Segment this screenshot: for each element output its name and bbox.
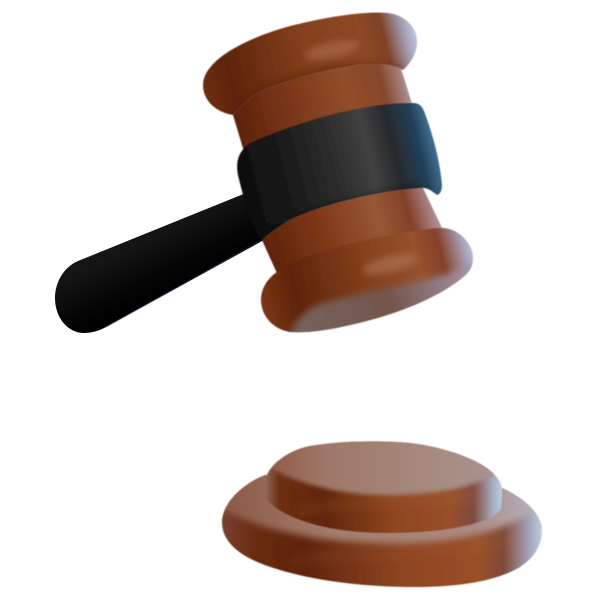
lower disc [221,474,542,588]
upper disc [266,440,502,534]
illustration: gavel and sound block [55,12,542,588]
upper barrel [232,62,412,150]
gavel handle [55,193,264,333]
top cap [202,12,418,116]
black band [236,102,443,240]
bottom cap [260,227,474,334]
ring top surface [224,474,534,548]
lower barrel [262,187,442,273]
gavel head [202,12,474,334]
top face [272,440,496,498]
underside of cap [285,262,472,332]
sound block [221,440,542,588]
